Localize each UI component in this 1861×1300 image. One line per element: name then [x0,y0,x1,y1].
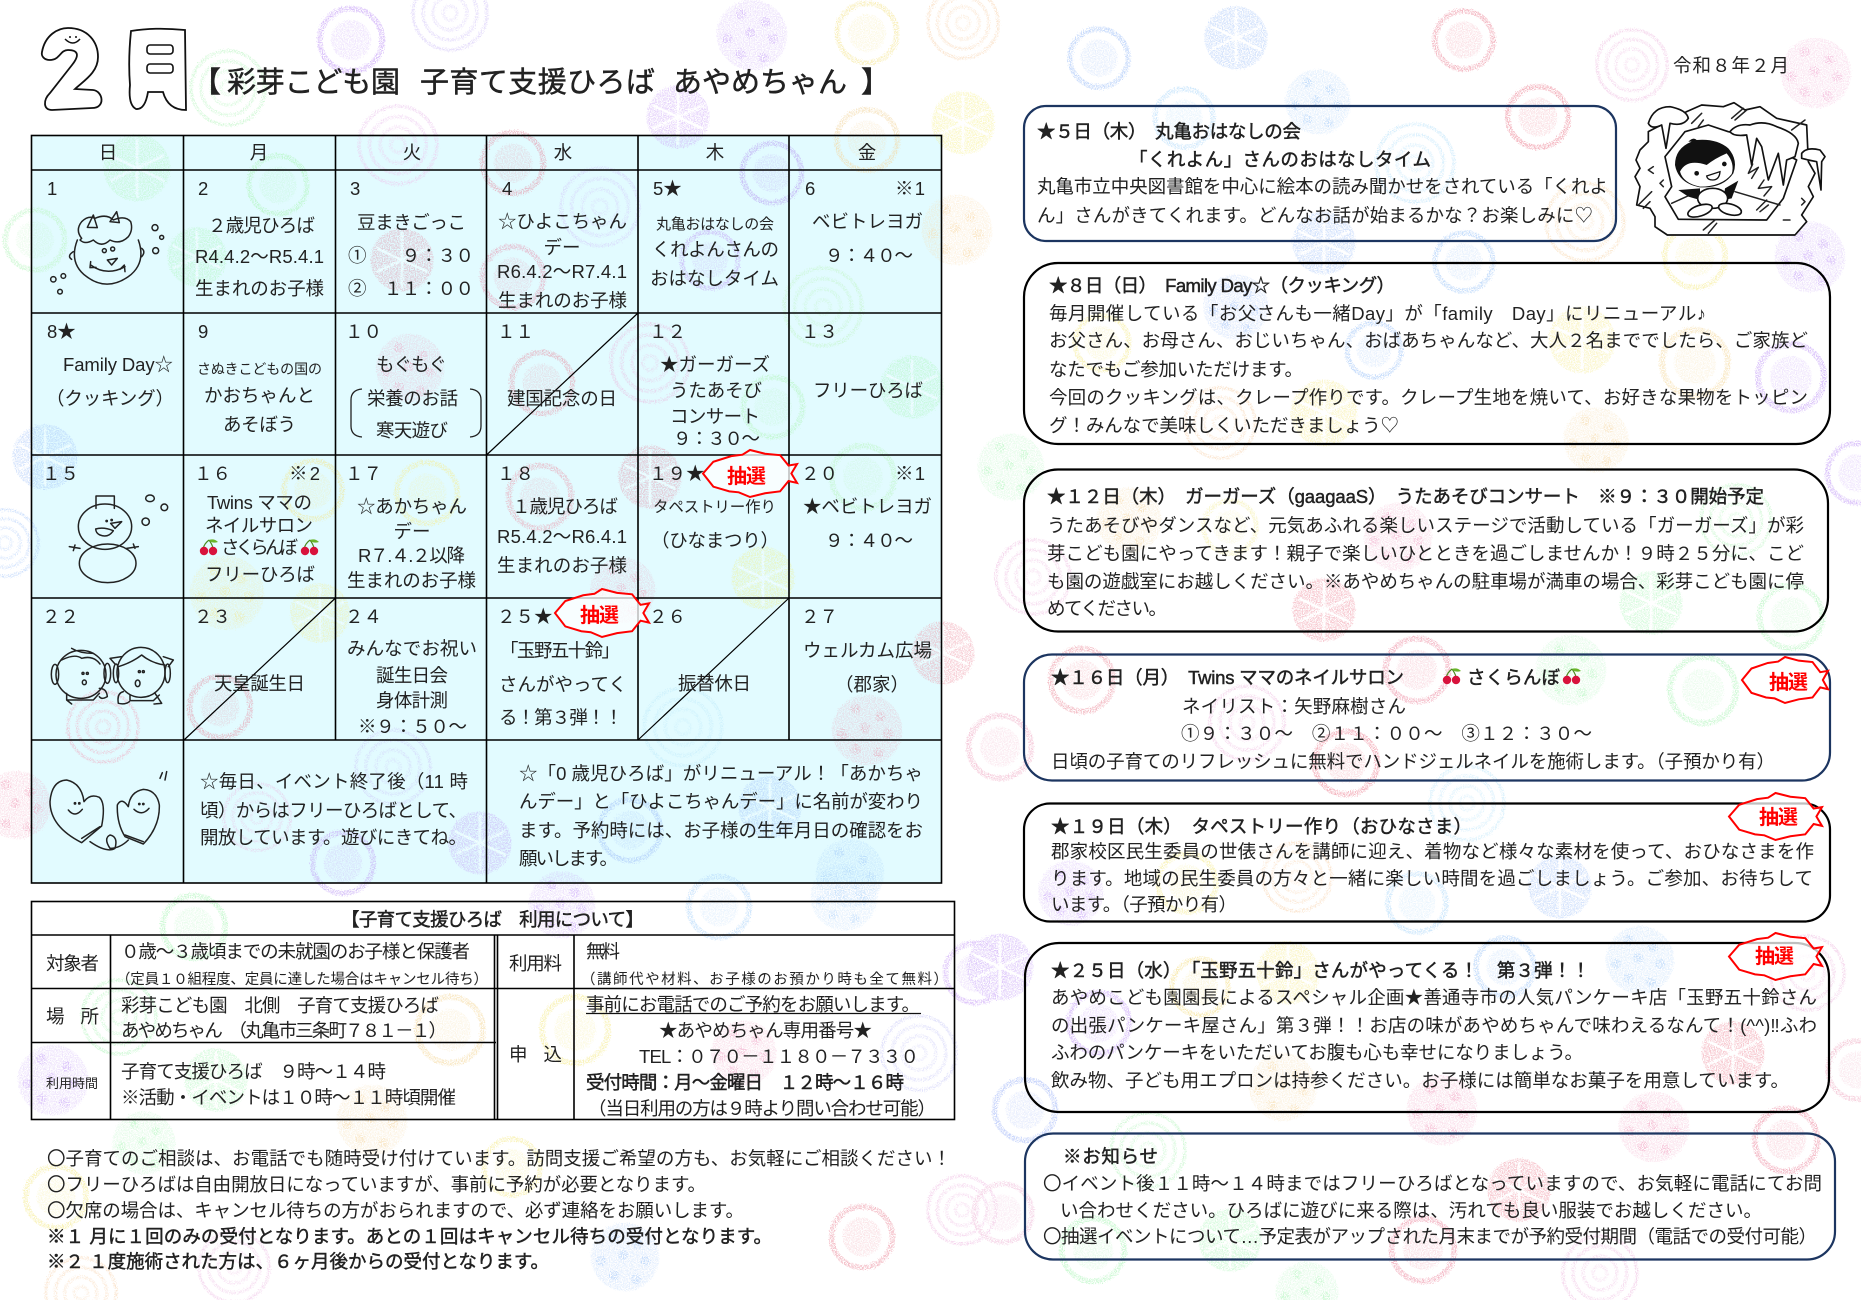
day 2: 2 [198,178,208,199]
text block: general notes: 〇フリーひろばは自由開放日になっていますが、事前に予約が必要となります。 [47,1174,706,1195]
day 16 [194,463,320,585]
panel: notices [1025,1134,1835,1260]
day 22: ２２ [42,606,79,627]
day 24: ２４ [345,606,382,627]
note: 0歳児ひろば renewal: 願いします。 [519,848,618,869]
row: fee: 無料 [586,941,620,962]
panel: 8日 Family Day: 今回のクッキングは、クレープ作りです。クレープ生地を焼いて、お好きな果物をトッピン [1049,387,1808,408]
row: application: 申 込 [509,1044,562,1065]
day 8: Family Day☆ [63,354,173,375]
day 25: 「玉野五十鈴」 [500,640,620,661]
panel: 25日 pancakes: ★２５日（水） 「玉野五十鈴」さんがやってくる！ 第３弾！！ [1051,960,1590,981]
weekday header: 日 [99,142,117,163]
panel: 8日 Family Day: グ！みんなで美味しくいただきましょう♡ [1049,415,1399,436]
note: free space: 頃）からはフリーひろばとして、 [200,800,467,821]
day 18: １８ [497,463,534,484]
day 4: 生まれのお子様 [498,290,627,311]
day 24: みんなでお祝い [347,638,477,659]
day 25 [497,606,627,728]
day 12: ★ガーガーズ [660,354,770,375]
day 20: ２０ [801,463,838,484]
day 3 [348,178,474,299]
day 23: 天皇誕生日 [214,673,305,694]
row: hours [46,1061,456,1108]
day 5: くれよんさんの [652,239,779,260]
day 5 [650,178,779,289]
panel: 8日 Family Day: 毎月開催している「お父さんも一緒Day」が「family Day」にリニューアル♪ [1049,303,1706,324]
day 5: おはなしタイム [650,268,779,289]
day 12: コンサート [670,406,760,427]
panel: notices: い合わせください。ひろばに遊びに来る際は、汚れても良い服装でお越しください。 [1060,1200,1762,1221]
day 6: 6 [805,178,815,199]
panel: notices: 〇抽選イベントについて…予定表がアップされた月末までが予約受付期間（電話での受付可能） [1043,1226,1817,1247]
row: target: 対象者 [46,953,99,974]
panel: 25日 pancakes: 飲み物、子ども用エプロンは持参ください。お子様には簡単なお菓子を用意しています。 [1051,1070,1789,1091]
day 27 [801,606,932,695]
day 16: ※2 [289,463,320,484]
panel: 12日 ガーガーズ: ★１２日（木） ガーガーズ（gaagaaS） うたあそびコンサート ※９：３０開始予定 [1047,486,1764,507]
day 20 [801,463,932,551]
panel: 19日 tapestry [1024,793,1830,922]
icon: snowman [69,495,168,583]
day 2: ２歳児ひろば [208,215,315,236]
day 3: 豆まきごっこ [357,212,466,233]
day 13: １３ [801,321,838,342]
row: place: 彩芽こども園 北側 子育て支援ひろば [121,995,439,1016]
panel: 25日 pancakes: の出張パンケーキ屋さん」第３弾！！お店の味があやめちゃんで味わえるなんて！(^^)‼ふわ [1051,1015,1817,1036]
day 16: ネイルサロン [205,515,313,536]
day 9: さぬきこどもの国の [197,361,322,377]
text block: general notes: ※２ １度施術された方は、６ヶ月後からの受付となります。 [47,1251,549,1272]
panel: 12日 ガーガーズ [1024,470,1828,632]
note: 0歳児ひろば renewal [519,763,923,869]
day 17: １７ [345,463,382,484]
panel: 5日 storytelling: ★５日（木） 丸亀おはなしの会 [1037,121,1301,142]
day 15: １５ [42,463,79,484]
day 16: さくらんぼ [221,537,298,558]
day 11: 建国記念の日 [507,388,617,409]
day 17: デー [393,521,431,542]
day 26: ２６ [649,606,686,627]
day 3: ② １１：００ [348,278,474,299]
day 13 [801,321,923,401]
day 19: タペストリー作り [653,498,776,516]
row: hours: 子育て支援ひろば ９時～１４時 [121,1061,386,1082]
weekday header: 月 [250,142,268,163]
icon: penguin in ice cave [1635,103,1825,235]
table title: 【子育て支援ひろば 利用について】 [341,909,644,930]
day 11: １１ [497,321,534,342]
calendar cell background [32,136,942,883]
day 18 [497,463,627,576]
day 24: ※９：５０～ [358,716,467,737]
weekday header: 火 [403,142,421,163]
day 10 [345,321,481,441]
row: hours: 利用時間 [46,1076,98,1091]
day 10: １０ [345,321,382,342]
day 6: ※1 [895,178,925,199]
callout: lottery badge: 抽選 [1769,671,1808,694]
day 12 [649,321,770,449]
day 11 [497,321,617,409]
day 5: 5★ [653,178,682,199]
row: fee [509,941,948,988]
text block: general notes: 〇子育てのご相談は、お電話でも随時受け付けています。訪問支援ご希望の方も、お気軽にご相談ください！ [47,1148,951,1169]
callout: lottery badge: 抽選 [1755,945,1794,968]
row: target: （定員１０組程度、定員に達した場合はキャンセル待ち） [116,971,488,988]
panel: 25日 pancakes: ふわのパンケーキをいただいてお腹も心も幸せになりましょう。 [1051,1042,1583,1063]
text block: general notes: ※１ 月に１回のみの受付となります。あとの１回はキャンセル待ちの受付となります。 [47,1226,772,1247]
day 20: ★ベビトレヨガ [803,496,932,517]
row: target: ０歳～３歳頃までの未就園のお子様と保護者 [121,941,470,962]
row: fee: （講師代や材料、お子様のお預かり時も全て無料） [581,971,948,988]
title text: あやめちゃん [673,67,847,99]
callout: lottery badge [1742,657,1828,703]
row: place: 場 所 [46,1006,99,1027]
day 5: 丸亀おはなしの会 [656,216,774,233]
note: 0歳児ひろば renewal: んデー」と「ひよこちゃんデー」に名前が変わり [519,791,923,812]
callout: lottery badge: 抽選 [1759,806,1798,829]
panel: 16日 Twins nail salon: さくらんぼ [1467,667,1560,688]
note: 0歳児ひろば renewal: ☆「0 歳児ひろば」がリニューアル！「あかちゃ [519,763,923,784]
day 23 [194,606,305,694]
day 6: ベビトレヨガ [812,211,923,232]
day 19: （ひなまつり） [651,530,779,551]
day 9: 9 [198,321,208,342]
day 1: 1 [47,178,57,199]
panel: 16日 Twins nail salon: ①９：３０～ ②１１：００～ ③１２：３０～ [1181,723,1592,744]
panel: usage table [32,902,954,1120]
day 25: る！第３弾！！ [499,707,623,728]
day 16: １６ [194,463,231,484]
panel: 16日 Twins nail salon: ネイリスト：矢野麻樹さん [1182,696,1406,717]
panel: 8日 Family Day: なたでもご参加いただけます。 [1049,359,1303,380]
calendar [32,136,942,883]
day 20: ９：４０～ [825,530,913,551]
row: application: 事前にお電話でのご予約をお願いします。 [586,994,920,1015]
weekday header [99,142,876,163]
day 10: 栄養のお話 [367,388,458,409]
day 10: もぐもぐ [376,354,447,375]
day 19: １９★ [649,463,705,484]
row: place: あやめちゃん （丸亀市三条町７８１－１） [121,1020,447,1041]
panel: 16日 Twins nail salon: 日頃の子育てのリフレッシュに無料でハンドジェルネイルを施術します。（子預かり有） [1051,751,1775,772]
day 25: ２５★ [497,606,553,627]
day 9 [197,321,322,435]
day 25: さんがやってく [499,674,627,695]
table grid [32,902,954,1120]
day 27: ウェルカム広場 [803,640,932,661]
day 17: R７.４.２以降 [358,545,465,566]
panel: 25日 pancakes: あやめこども園園長によるスペシャル企画★善通寺市の人気パンケーキ店「玉野五十鈴さん [1051,987,1817,1008]
day 8: （クッキング） [46,388,174,409]
callout: lottery badge 25: 抽選 [580,604,619,627]
panel: 5日 storytelling [1024,106,1616,241]
row: application: （当日利用の方は９時より問い合わせ可能） [588,1098,936,1119]
text block: general notes [47,1148,951,1272]
day 13: フリーひろば [813,380,923,401]
day 10: 寒天遊び [376,420,448,441]
note: free space [200,771,468,848]
day 19 [649,463,779,551]
callout: lottery badge [1729,793,1822,840]
panel: 8日 Family Day [1024,263,1830,444]
text block: general notes: 〇欠席の場合は、キャンセル待ちの方がおられますので、必ず連絡をお願いします。 [47,1200,744,1221]
day 18: R5.4.2～R6.4.1 [497,526,627,547]
panel: 16日 Twins nail salon [1024,654,1830,780]
panel: 19日 tapestry: 郡家校区民生委員の世俵さんを講師に迎え、着物など様々な素材を使って、おひなさまを作 [1051,841,1814,862]
title text: 子育て支援ひろば [420,66,655,99]
title: big hand-drawn 2月 [42,28,186,110]
day 6 [805,178,925,266]
day 24: 身体計測 [376,690,448,711]
panel: 12日 ガーガーズ: 芽こども園にやってきます！親子で楽しいひとときを過ごしませんか！９時２５分に、こど [1047,543,1804,564]
title text: 彩芽こども園 [227,66,400,99]
row: target [46,941,488,988]
day 27: （郡家） [835,674,909,695]
callout: lottery badge 25 [555,589,649,637]
day 8 [46,321,174,409]
panel: 19日 tapestry: ★１９日（木） タペストリー作り（おひなさま） [1051,816,1472,837]
panel: 12日 ガーガーズ: めてください。 [1047,598,1167,619]
row: fee: 利用料 [509,953,562,974]
callout: lottery badge [1729,933,1822,980]
day 6: ９：４０～ [825,245,913,266]
title text [192,66,890,99]
day 20: ※1 [895,463,925,484]
row: application [509,994,936,1119]
day 12: １２ [649,321,686,342]
panel: 19日 tapestry: います。（子預かり有） [1051,894,1237,915]
day 8: 8★ [47,321,76,342]
day 4: 4 [502,178,512,199]
calendar grid [32,136,942,883]
day 2 [195,178,324,299]
day 9: あそぼう [223,414,296,435]
panel: notices: 〇イベント後１１時～１４時まではフリーひろばとなっていますので、お気軽に電話にてお問 [1043,1173,1822,1194]
panel: 5日 storytelling: 「くれよん」さんのおはなしタイム [1129,149,1431,170]
panel: 16日 Twins nail salon: ★１６日（月） Twins ママのネイルサロン [1051,667,1404,688]
callout: lottery badge 19 [703,450,797,497]
icon: mittens [50,772,167,850]
row: application: 受付時間：月～金曜日 １２時～１６時 [586,1072,904,1093]
day 18: １歳児ひろば [512,496,618,517]
date text top right: 令和８年２月 [1673,55,1789,76]
row: hours: ※活動・イベントは１０時～１１時頃開催 [121,1087,456,1108]
note: free space: ☆毎日、イベント終了後（11 時 [200,771,468,792]
panel: 12日 ガーガーズ: うたあそびやダンスなど、元気あふれる楽しいステージで活動している「ガーガーズ」が彩 [1047,515,1804,536]
row: application: TEL：０７０－１１８０－７３３０ [639,1046,919,1067]
day 16: Twins ママの [207,492,312,513]
day 2: R4.4.2～R5.4.1 [195,246,324,267]
icon: oni [51,212,164,294]
callout: lottery badge 19: 抽選 [727,465,766,488]
day 17: 生まれのお子様 [347,570,476,591]
day 23: ２３ [194,606,231,627]
day 17 [345,463,476,591]
day 27: ２７ [801,606,838,627]
day 12: うたあそび [670,380,762,401]
day 9: かおちゃんと [204,385,315,406]
row: application: ★あやめちゃん専用番号★ [659,1020,872,1041]
day 2: 生まれのお子様 [195,278,324,299]
note: free space: 開放しています。遊びにきてね。 [200,827,467,848]
day 3: ① ９：３０ [348,245,474,266]
panel: 5日 storytelling: 丸亀市立中央図書館を中心に絵本の読み聞かせをされている「くれよ [1037,176,1608,197]
day 3: 3 [350,178,360,199]
day 26: 振替休日 [678,673,751,694]
day 4: デー [543,237,581,258]
weekday header: 水 [554,142,572,163]
day 24: 誕生日会 [376,665,448,686]
day 12: ９：３０～ [673,428,760,449]
day 16: フリーひろば [205,564,315,585]
panel: notices: ※お知らせ [1063,1146,1158,1167]
panel: 19日 tapestry: ります。地域の民生委員の方々と一緒に楽しい時間を過ごしましょう。ご参加、お待ちして [1051,868,1813,889]
day 17: ☆あかちゃん [357,496,467,517]
day 26 [649,606,751,694]
panel: 25日 pancakes [1025,933,1829,1112]
day 4 [497,178,627,311]
title text: 【 [192,67,221,99]
panel: 8日 Family Day: お父さん、お母さん、おじいちゃん、おばあちゃんなど、大人２名まででしたら、ご家族ど [1049,330,1808,351]
weekday header: 木 [706,142,724,163]
panel: 8日 Family Day: ★８日（日） Family Day☆（クッキング） [1049,275,1395,296]
row: place [46,995,447,1041]
panel: 12日 ガーガーズ: も園の遊戯室にお越しください。※あやめちゃんの駐車場が満車の場合、彩芽こども園に停 [1047,571,1804,592]
day 24 [345,606,477,737]
day 4: ☆ひよこちゃん [498,211,627,232]
icon: two children [51,647,173,704]
note: 0歳児ひろば renewal: ます。予約時には、お子様の生年月日の確認をお [519,820,923,841]
title text: 】 [861,67,890,99]
day 18: 生まれのお子様 [497,555,627,576]
weekday header: 金 [858,142,876,163]
day 4: R6.4.2～R7.4.1 [497,261,627,282]
panel: 5日 storytelling: ん」さんがきてくれます。どんなお話が始まるかな？お楽しみに♡ [1037,205,1593,226]
